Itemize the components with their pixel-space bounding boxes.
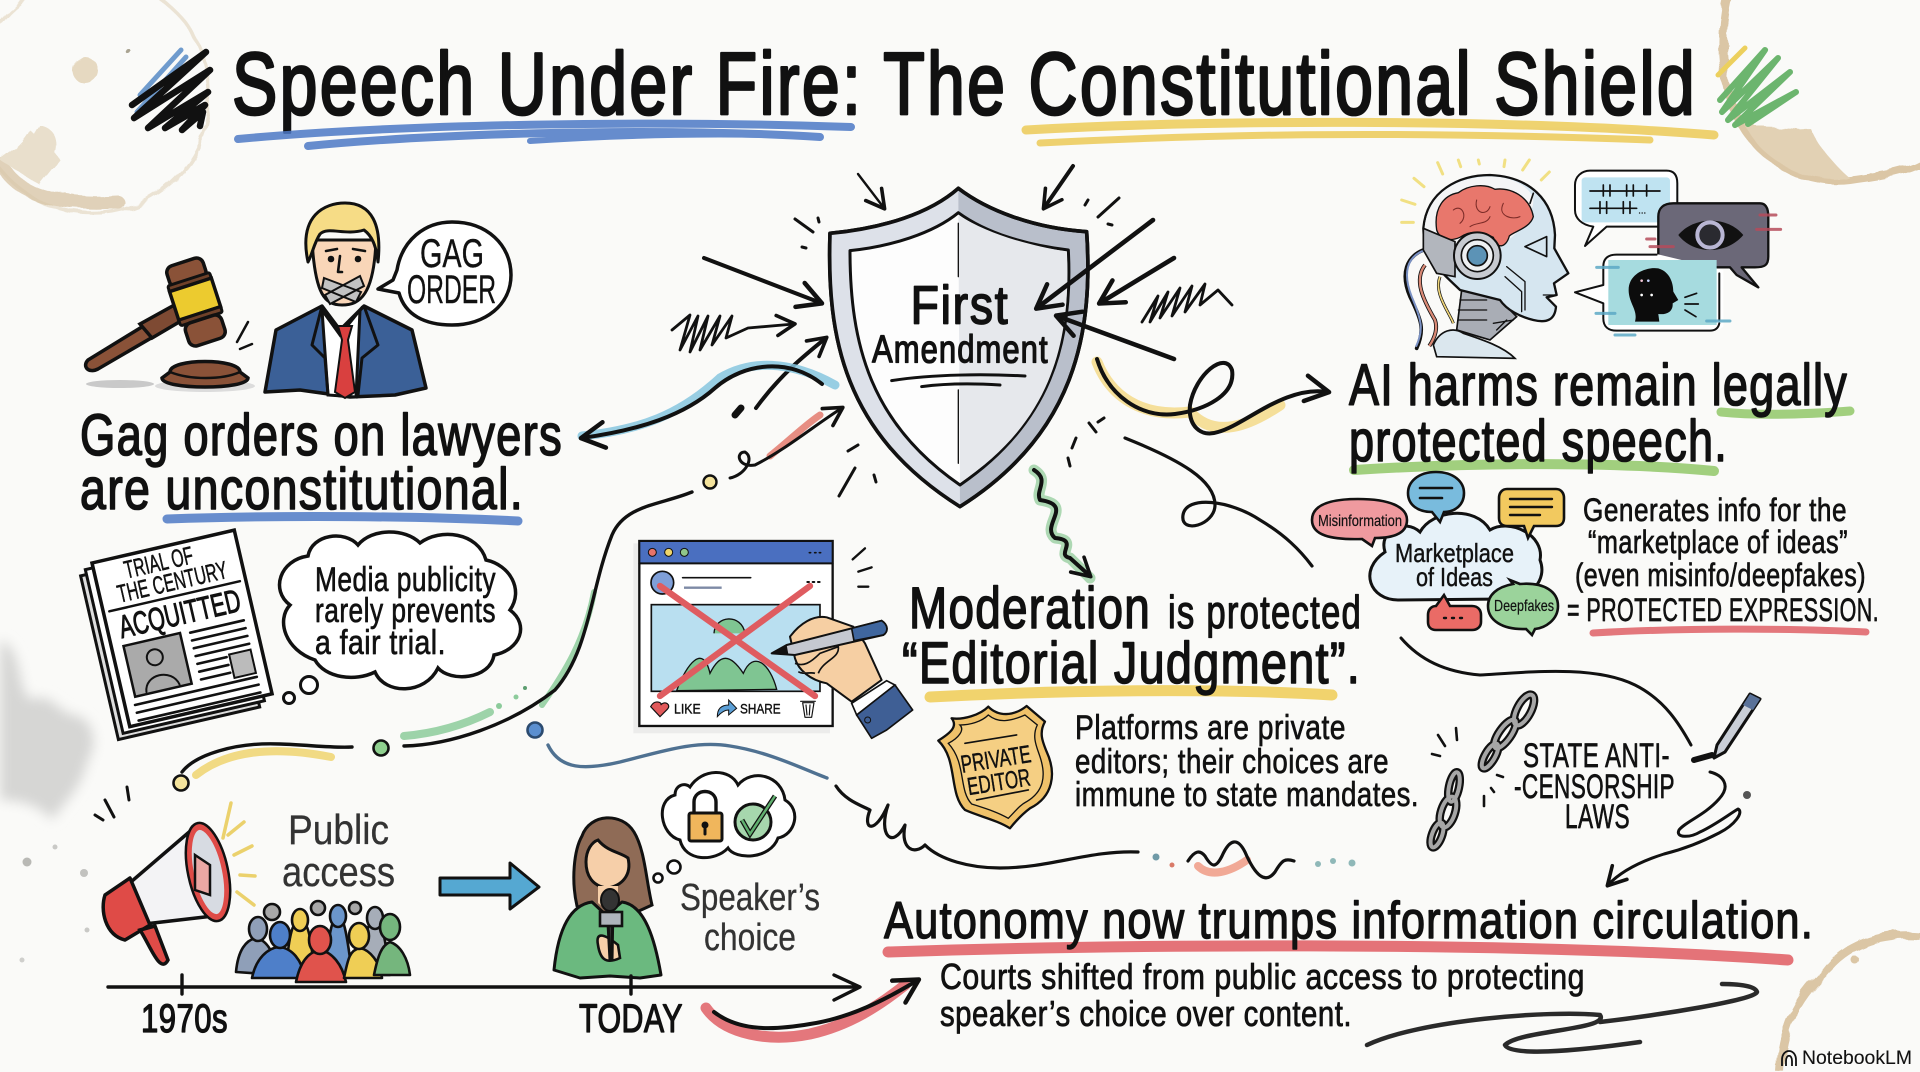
title scribble left [132, 50, 210, 130]
right arrow [1100, 258, 1174, 303]
thought cloud: media publicity [280, 532, 521, 704]
1970s label: 1970s [141, 997, 228, 1041]
ear plate and earpiece [1423, 228, 1455, 277]
text: courts shifted: Courts shifted from public access to protecting [940, 956, 1585, 997]
red curved arrow to autonomy [706, 980, 918, 1037]
text: courts shifted [940, 956, 1585, 1034]
black scribble bottom [1367, 984, 1757, 1052]
browser post with red cross and hand [633, 541, 913, 738]
tape [322, 276, 364, 304]
heading: gag orders [80, 403, 563, 522]
cuff [852, 681, 895, 715]
marketplace of ideas cluster [1312, 472, 1564, 635]
skull and face [1423, 175, 1568, 321]
speech bubble: gag order [378, 222, 511, 325]
speech bubble: gag order: ORDER [407, 268, 496, 312]
broken chain icon [1428, 692, 1538, 849]
heading: moderation [902, 576, 1362, 697]
text: state anti-censorship laws [1514, 737, 1675, 836]
red squiggle arrow [730, 408, 842, 478]
shield: first amendment [830, 188, 1088, 507]
label: public access [282, 806, 395, 895]
heading: AI harms [1349, 353, 1850, 474]
green squiggle arrow to moderation [1034, 470, 1090, 578]
underline [888, 946, 1788, 960]
label: public access: access [282, 848, 395, 895]
timeline connector curve with dots [174, 476, 716, 790]
long arrow [1037, 220, 1153, 308]
coffee stain: top right [1722, 0, 1920, 181]
text: platforms are private editors [1075, 709, 1419, 814]
title underline yellow [1026, 122, 1714, 143]
speech bubble: gag order: GAG [420, 232, 484, 276]
title underline blue [238, 124, 851, 146]
thought cloud: media publicity: rarely prevents [315, 592, 496, 630]
tick marks [795, 198, 1119, 496]
heading: gag orders: are unconstitutional. [80, 457, 524, 522]
newspaper icon: ACQUITTED [115, 582, 244, 645]
upward arrow [756, 338, 826, 408]
rays [1402, 160, 1549, 222]
text: state anti-censorship laws: LAWS [1565, 798, 1630, 836]
arrows attacking the shield [672, 166, 1232, 496]
top left thin arrow [858, 174, 884, 208]
yellow bubble [1499, 489, 1564, 538]
AI robot head: ... [1638, 205, 1646, 215]
watercolor stain: grey left [0, 640, 94, 962]
heading: AI harms: protected speech. [1349, 409, 1728, 474]
underline protected speech [1354, 464, 1714, 471]
thought cloud: media publicity: Media publicity [315, 561, 496, 599]
check [735, 804, 771, 840]
face and hair [312, 240, 376, 305]
black flow curve [1125, 438, 1312, 566]
coffee stain: bottom right [1780, 935, 1920, 1072]
label: speaker's choice: choice [704, 917, 796, 959]
private editor badge [938, 706, 1052, 828]
top right arrow [1044, 166, 1073, 208]
text: state anti-censorship laws: STATE ANTI- [1523, 737, 1670, 775]
bubble: eye [1658, 203, 1768, 287]
underline [930, 691, 1332, 697]
title [132, 34, 1796, 146]
wires [1405, 250, 1423, 348]
shield: first amendment: Amendment [872, 328, 1049, 372]
lower right arrow [1057, 316, 1174, 359]
lawyer with taped mouth [265, 203, 426, 398]
label: public access: Public [288, 806, 389, 853]
first amendment text: First [911, 276, 1009, 335]
arrow: public access to speaker's choice [440, 863, 539, 909]
marketplace of ideas cluster: of Ideas [1416, 562, 1493, 592]
text: marketplace explanation: Generates info for the [1583, 492, 1847, 528]
heading: moderation: “Editorial Judgment”. [902, 631, 1361, 696]
marketplace of ideas cluster: Misinformation [1318, 513, 1402, 530]
blob [735, 408, 741, 415]
label: speaker's choice [680, 877, 820, 959]
heading: gag orders: Gag orders on lawyers [80, 403, 563, 468]
neck [1457, 290, 1517, 340]
shoulder [1433, 330, 1515, 358]
right zigzag [1142, 284, 1232, 322]
suit [265, 306, 426, 397]
private editor badge: EDITOR [966, 764, 1032, 801]
pen drawing the flow line down to autonomy [1401, 638, 1760, 885]
red underline [1593, 629, 1866, 633]
private editor badge: PRIVATE [959, 741, 1033, 779]
newspaper icon: TRIAL OF [121, 541, 196, 585]
left straight arrow [704, 258, 821, 303]
browser post with red cross and hand: SHARE [740, 700, 781, 716]
misinformation bubble [1312, 499, 1407, 546]
yellow loop arrow to AI heading [1097, 359, 1328, 433]
pen [772, 621, 887, 655]
text: state anti-censorship laws: -CENSORSHIP [1514, 768, 1675, 806]
brain [1436, 186, 1533, 246]
megaphone icon [95, 787, 255, 964]
text: marketplace explanation: “marketplace of ideas” [1588, 524, 1848, 560]
heading: moderation: Moderation [909, 576, 1151, 641]
reporter figure [554, 818, 661, 978]
blue bubble [1408, 472, 1464, 522]
gavel icon [86, 255, 255, 392]
label: speaker's choice: Speaker’s [680, 877, 820, 919]
heading: moderation: is protected [1168, 586, 1362, 638]
text: marketplace explanation [1567, 492, 1879, 633]
thought cloud: media publicity: a fair trial. [315, 624, 446, 662]
AI robot head [1402, 160, 1781, 358]
deepfakes bubble [1488, 580, 1558, 635]
newspaper icon: THE CENTURY [115, 556, 230, 609]
bubble: head [1575, 254, 1723, 331]
coffee stain: top left [0, 0, 210, 213]
marketplace of ideas cluster: Deepfakes [1494, 598, 1554, 615]
today label: TODAY [579, 997, 683, 1041]
eyes [326, 249, 365, 272]
hand [790, 617, 882, 702]
text: platforms are private editors: editors; their choices are [1075, 743, 1389, 781]
cloud [1370, 513, 1542, 600]
red bubble [1428, 595, 1481, 630]
browser post with red cross and hand: LIKE [674, 700, 701, 716]
NotebookLM logo: NotebookLM [1802, 1048, 1912, 1069]
underline legally [1721, 411, 1850, 414]
underline [167, 517, 518, 521]
title scribble right [1718, 48, 1796, 125]
text: courts shifted: speaker’s choice over content. [940, 993, 1352, 1034]
double-headed blue wave arrow to heading [582, 365, 835, 438]
newspaper icon [78, 530, 274, 740]
bubble: text lines [1575, 171, 1677, 246]
blue and wavy line to autonomy [548, 744, 1356, 878]
zigzag with arrow [672, 315, 794, 352]
text: platforms are private editors: Platforms are private [1075, 709, 1346, 747]
lock [694, 792, 716, 815]
crowd icon [236, 901, 410, 982]
marketplace of ideas cluster: Marketplace [1395, 538, 1514, 568]
timeline axis [108, 975, 860, 1041]
text: platforms are private editors: immune to state mandates. [1075, 776, 1419, 814]
thought cloud: lock and check [654, 772, 795, 882]
